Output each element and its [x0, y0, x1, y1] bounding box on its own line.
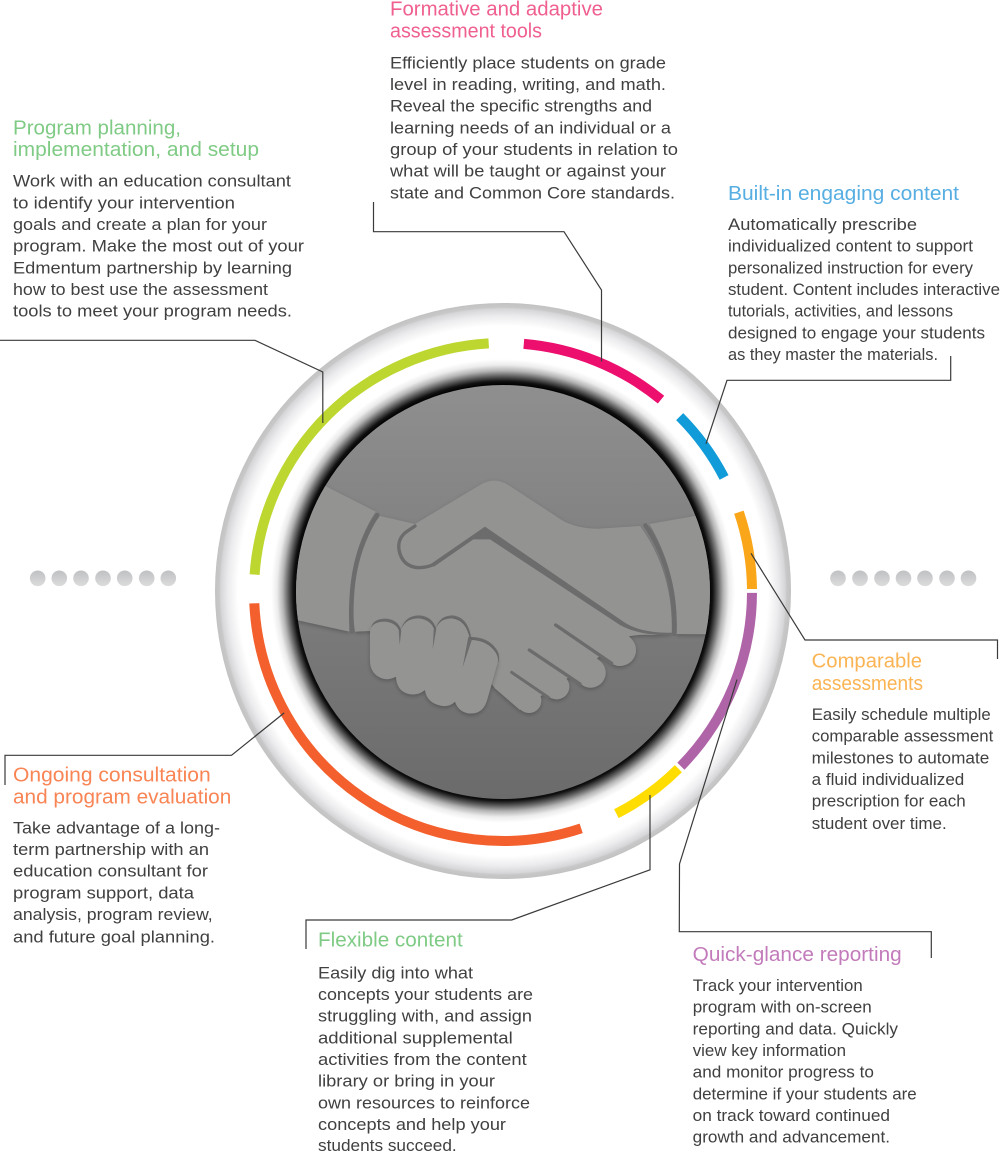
arc: quick-glance reporting — [681, 593, 752, 766]
text block: formative assessment: group of your students in relation to — [390, 140, 678, 159]
text block: flexible content: own resources to reinforce — [318, 1093, 530, 1112]
text block: program planning: Work with an education consultant — [13, 172, 291, 191]
text block: comparable assessments: milestones to automate — [812, 748, 989, 767]
leader line: quick-glance reporting — [679, 680, 931, 958]
text block: ongoing consultation: Take advantage of a long- — [13, 818, 220, 837]
text block: flexible content: concepts your students are — [318, 985, 533, 1004]
text block: flexible content: Flexible content — [318, 930, 463, 952]
leader line: program planning — [0, 340, 323, 423]
text block: formative assessment: state and Common Core standards. — [390, 183, 675, 202]
text block: quick-glance reporting: Quick-glance reporting — [693, 944, 902, 966]
text block: comparable assessments: Comparable — [812, 651, 922, 673]
text block: comparable assessments: prescription for each — [812, 792, 966, 811]
text block: ongoing consultation — [13, 765, 231, 946]
text block: quick-glance reporting: Track your intervention — [693, 976, 863, 995]
outer ring disc — [215, 303, 791, 879]
text block: quick-glance reporting: growth and advancement. — [693, 1128, 890, 1147]
text block: formative assessment — [389, 0, 678, 202]
text block: program planning: goals and create a plan for your — [13, 215, 267, 234]
text block: engaging content: individualized content to support — [728, 237, 973, 256]
text block: formative assessment: level in reading, writing, and math. — [390, 75, 666, 94]
text block: program planning: program. Make the most out of your — [13, 237, 304, 256]
text block: quick-glance reporting: on track toward continued — [693, 1106, 890, 1125]
icon: handshake — [287, 481, 720, 714]
text block: ongoing consultation: term partnership with an — [13, 840, 209, 859]
text block: comparable assessments: comparable assessment — [812, 727, 994, 746]
text block: quick-glance reporting — [693, 944, 917, 1147]
text block: ongoing consultation: and program evaluation — [13, 786, 231, 808]
text block: engaging content — [728, 183, 1000, 364]
text block: formative assessment: learning needs of an individual or a — [390, 118, 672, 137]
leader line: engaging content — [706, 356, 951, 444]
arc: comparable assessments — [739, 512, 752, 589]
text block: program planning: Program planning, — [13, 118, 181, 140]
text block: engaging content: Built-in engaging content — [728, 183, 959, 205]
text block: ongoing consultation: analysis, program review, — [13, 905, 213, 924]
text block: flexible content: library or bring in your — [318, 1072, 495, 1091]
text block: ongoing consultation: and future goal planning. — [13, 927, 215, 946]
text block: engaging content: designed to engage your students — [728, 323, 985, 342]
arc: flexible content — [616, 769, 678, 814]
text block: flexible content — [318, 930, 533, 1152]
text block: ongoing consultation: Ongoing consultation — [13, 765, 211, 787]
arc: engaging content — [680, 417, 724, 477]
text block: formative assessment: what will be taught or against your — [389, 162, 666, 181]
text block: quick-glance reporting: and monitor progress to — [693, 1063, 874, 1082]
text block: flexible content: additional supplemental — [318, 1028, 513, 1047]
text block: program planning: how to best use the assessment — [13, 280, 268, 299]
arc: program planning — [255, 343, 489, 575]
text block: comparable assessments: a fluid individualized — [812, 770, 964, 789]
dots: left — [30, 570, 176, 586]
text block: engaging content: tutorials, activities, and lessons — [728, 302, 953, 321]
text block: quick-glance reporting: view key information — [693, 1041, 846, 1060]
text block: ongoing consultation: program support, data — [13, 883, 195, 902]
text block: engaging content: Automatically prescribe — [728, 215, 917, 234]
arc: ongoing consultation — [254, 603, 581, 841]
text block: formative assessment: Reveal the specific strengths and — [390, 97, 652, 116]
text block: flexible content: concepts and help your — [318, 1115, 506, 1134]
text block: ongoing consultation: education consultant for — [13, 862, 208, 881]
text block: quick-glance reporting: determine if your students are — [693, 1084, 917, 1103]
leader line: comparable assessments — [751, 553, 998, 659]
leader line: ongoing consultation — [5, 713, 284, 785]
text block: engaging content: student. Content includes interactive — [728, 280, 1000, 299]
text block: formative assessment: assessment tools — [390, 20, 542, 42]
text block: flexible content: struggling with, and assign — [318, 1007, 532, 1026]
text block: program planning — [13, 118, 304, 321]
arc: formative assessment — [524, 344, 661, 400]
text block: engaging content: as they master the materials. — [728, 345, 938, 364]
text block: quick-glance reporting: program with on-screen — [693, 998, 872, 1017]
text block: flexible content: activities from the content — [318, 1050, 527, 1069]
text block: comparable assessments: assessments — [812, 673, 923, 695]
text block: engaging content: personalized instruction for every — [728, 258, 973, 277]
dots: right — [830, 570, 976, 586]
text block: comparable assessments — [812, 651, 994, 833]
text block: quick-glance reporting: reporting and data. Quickly — [693, 1019, 899, 1038]
text block: program planning: to identify your intervention — [13, 193, 235, 212]
text block: program planning: implementation, and setup — [13, 139, 259, 161]
text block: comparable assessments: Easily schedule multiple — [812, 705, 991, 724]
text block: formative assessment: Efficiently place students on grade — [390, 53, 666, 72]
central handshake medallion — [287, 385, 720, 799]
text block: program planning: tools to meet your program needs. — [13, 302, 292, 321]
text block: flexible content: Easily dig into what — [318, 963, 473, 982]
text block: program planning: Edmentum partnership by learning — [13, 258, 292, 277]
leader line: formative assessment — [374, 202, 602, 362]
text block: comparable assessments: student over time. — [812, 814, 947, 833]
leader line: flexible content — [306, 795, 650, 949]
